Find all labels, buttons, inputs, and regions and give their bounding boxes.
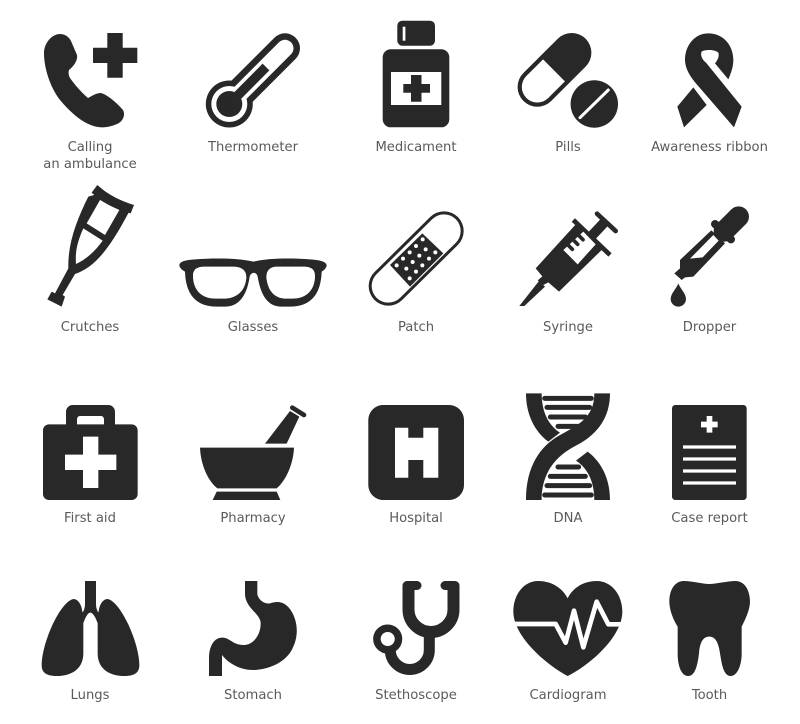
- cell: lungs: [42, 581, 139, 703]
- icon: capsule and tablet: [522, 53, 618, 128]
- label: Medicament: Medicament: [375, 140, 457, 155]
- label: Glasses: Glasses: [228, 320, 278, 335]
- icon: dropper: [671, 217, 739, 307]
- label: Syringe: Syringe: [543, 320, 593, 335]
- label: Case report: Case report: [671, 511, 748, 526]
- cell: pills: [522, 53, 618, 155]
- cell: syringe: [519, 214, 616, 335]
- cell: glasses: [179, 259, 327, 335]
- cell: thermometer: [206, 48, 299, 155]
- cell: first aid: [43, 405, 138, 526]
- label: Calling an ambulance: Calling: [68, 140, 112, 155]
- label: Tooth: Tooth: [691, 688, 727, 703]
- label: Crutches: Crutches: [61, 320, 119, 335]
- label: Awareness ribbon: Awareness ribbon: [651, 140, 768, 155]
- cell: calling an ambulance: [43, 33, 137, 172]
- icon: medical report: [672, 405, 747, 500]
- cell: DNA: [526, 393, 610, 526]
- icon: stethoscope: [377, 586, 455, 670]
- cell: stethoscope: [375, 586, 457, 703]
- icon: glasses: [179, 259, 327, 307]
- cell: stomach: [209, 581, 297, 703]
- icon: phone with plus: [44, 33, 137, 127]
- cell: case report: [671, 405, 748, 526]
- cell: medicament: [375, 21, 457, 155]
- icon: stomach: [209, 581, 297, 676]
- icon: thermometer: [206, 48, 285, 127]
- label: Cardiogram: Cardiogram: [529, 688, 607, 703]
- label: First aid: First aid: [64, 511, 116, 526]
- icon: syringe: [519, 214, 616, 306]
- icon: hospital sign: [368, 405, 464, 500]
- label: Stethoscope: Stethoscope: [375, 688, 457, 703]
- icon: adhesive bandage: [388, 231, 444, 287]
- icon: heart with pulse line: [513, 581, 623, 676]
- icon: ribbon: [677, 33, 742, 127]
- icon: tooth: [669, 581, 750, 676]
- cell: awareness ribbon: [651, 33, 768, 155]
- label: Pharmacy: Pharmacy: [220, 511, 286, 526]
- label: Calling an ambulance: an ambulance: [43, 157, 137, 172]
- cell: pharmacy: [200, 408, 304, 526]
- icon: DNA helix: [526, 393, 610, 500]
- icon: lungs: [42, 581, 139, 676]
- cell: crutches: [47, 185, 134, 335]
- label: DNA: DNA: [554, 511, 582, 526]
- cell: cardiogram: [513, 581, 623, 703]
- label: Stomach: Stomach: [224, 688, 282, 703]
- label: Lungs: Lungs: [71, 688, 110, 703]
- cell: hospital: [368, 405, 464, 526]
- label: Pills: Pills: [555, 140, 581, 155]
- label: Dropper: Dropper: [683, 320, 737, 335]
- icon: first aid kit: [43, 405, 138, 500]
- label: Thermometer: Thermometer: [207, 140, 299, 155]
- icon: crutch: [47, 185, 134, 307]
- icon: medicine bottle: [383, 21, 449, 127]
- label: Patch: Patch: [398, 320, 434, 335]
- label: Hospital: Hospital: [389, 511, 443, 526]
- icon: mortar and pestle: [200, 408, 304, 500]
- cell: dropper: [671, 217, 739, 335]
- cell: patch: [388, 231, 444, 335]
- cell: tooth: [669, 581, 750, 703]
